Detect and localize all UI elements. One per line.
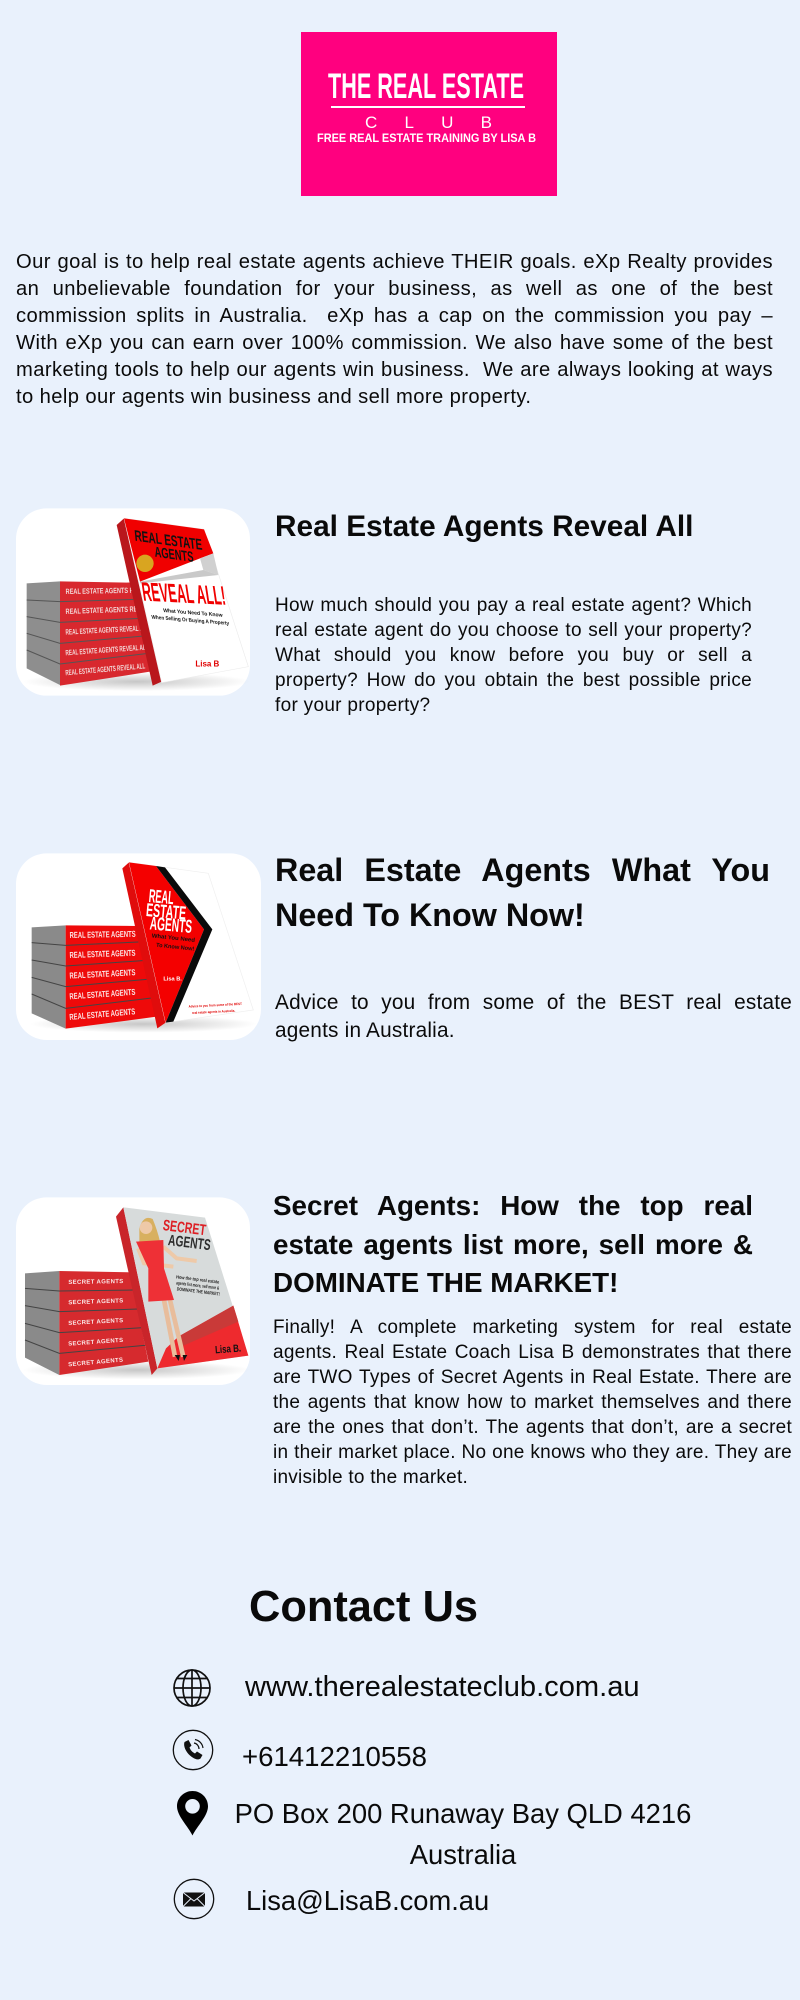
- standing book: agents list more, sell more &: [176, 1280, 220, 1291]
- panel: book 3 image, Secret Agents: [16, 1198, 250, 1385]
- stack of books: REAL ESTATE AGENTS REVEAL ALL: [65, 623, 149, 637]
- text block: Secret Agents description: [273, 1316, 792, 1488]
- intro paragraph: With eXp you can earn over 100% commission. We also have some of the best: [16, 332, 773, 354]
- standing book: ESTATE: [145, 899, 187, 923]
- stack of books: SECRET AGENTS: [68, 1338, 123, 1348]
- stack of books: REAL ESTATE AGENTS REVEAL ALL: [65, 661, 146, 677]
- standing book: Advice to you from some of the BEST: [189, 1002, 242, 1009]
- heading: Real Estate Agents What You Need To Know Now: Real Estate Agents What You: [275, 852, 770, 888]
- text block: Reveal All description: [275, 595, 752, 716]
- heading: Secret Agents: Secret Agents: How the top real: [273, 1190, 753, 1221]
- standing book: What You Need: [151, 933, 196, 944]
- text block: Secret Agents description: in their market place. No one knows who they are. They are: [273, 1442, 792, 1462]
- text block: Reveal All description: real estate agent do you choose to sell your property?: [275, 620, 752, 641]
- heading: Real Estate Agents What You Need To Know Now: [275, 852, 770, 933]
- address: PO Box 200 Runaway Bay QLD 4216: [235, 1798, 691, 1829]
- standing book: SECRET: [162, 1217, 207, 1239]
- heading: Contact Us: Contact Us: [249, 1583, 478, 1631]
- text block: Secret Agents description: agents. Real Estate Coach Lisa B demonstrates that there: [273, 1342, 792, 1362]
- logo: The Real Estate Club: FREE REAL ESTATE TRAINING BY LISA B: [317, 131, 536, 145]
- text block: Secret Agents description: the agents that know how to market themselves and there: [273, 1392, 792, 1412]
- standing book: What You Need To Know: [163, 608, 224, 619]
- phone number: +61412210558: [242, 1741, 427, 1772]
- standing book: To Know Now!: [156, 943, 195, 953]
- standing book: [116, 1207, 248, 1375]
- standing book: Lisa B: [195, 660, 220, 669]
- icon: email: [174, 1878, 214, 1920]
- text block: Secret Agents description: invisible to the market.: [273, 1466, 468, 1488]
- stack of books: SECRET AGENTS: [68, 1298, 123, 1306]
- standing book: AGENTS: [154, 545, 194, 566]
- text block: Secret Agents description: are TWO Types of Secret Agents in Real Estate. There are: [273, 1366, 792, 1388]
- intro paragraph: Our goal is to help real estate agents achieve THEIR goals. eXp Realty provides: [16, 251, 773, 273]
- standing book: AGENTS: [149, 912, 193, 937]
- intro paragraph: an unbelievable foundation for your business, as well as one of the best: [16, 278, 773, 300]
- standing book: How the top real estate: [176, 1274, 220, 1285]
- standing book: [122, 862, 253, 1028]
- stack of books: REAL ESTATE AGENTS REVEAL ALL: [65, 643, 149, 657]
- icon: phone: [172, 1730, 214, 1770]
- website: www.therealestateclub.com.au: [245, 1671, 640, 1703]
- stack of books: SECRET AGENTS: [68, 1279, 123, 1286]
- stack of books: [27, 581, 153, 686]
- stack of books: REAL ESTATE AGENTS: [70, 929, 136, 940]
- address: [235, 1798, 691, 1870]
- text block: Secret Agents description: are the ones that don’t. The agents that don’t, are a secret: [273, 1416, 792, 1438]
- email address: Lisa@LisaB.com.au: [246, 1885, 489, 1916]
- stack of books: SECRET AGENTS: [68, 1318, 123, 1327]
- panel: book 2 image, What You Need To Know Now: [16, 854, 261, 1040]
- standing book: [117, 518, 248, 686]
- address: Australia: [410, 1839, 516, 1870]
- standing book: Lisa B.: [215, 1343, 241, 1356]
- text block: Reveal All description: for your property?: [275, 695, 430, 716]
- heading: Secret Agents: estate agents list more, sell more &: [273, 1228, 753, 1260]
- heading: Secret Agents: [273, 1190, 753, 1298]
- intro paragraph: [16, 251, 773, 408]
- standing book: REAL ESTATE: [134, 528, 203, 554]
- stack of books: REAL ESTATE AGENTS: [69, 967, 136, 981]
- stack of books: REAL ESTATE AGENTS: [69, 987, 136, 1001]
- text block: Reveal All description: How much should you pay a real estate agent? Which: [275, 595, 752, 616]
- stack of books: REAL ESTATE AGENTS: [69, 1006, 136, 1022]
- standing book: REAL: [148, 885, 175, 908]
- heading: Secret Agents: DOMINATE THE MARKET!: [273, 1267, 618, 1298]
- stack of books: REAL ESTATE AGENTS REVEAL: [66, 585, 153, 596]
- standing book: When Selling Or Buying A Property: [151, 615, 229, 627]
- standing book: DOMINATE THE MARKET!: [177, 1286, 220, 1297]
- panel: book 1 image, Reveal All: [16, 508, 250, 696]
- stack of books: [25, 1271, 148, 1375]
- stack of books: [32, 925, 157, 1029]
- logo: The Real Estate Club: CLUB: [365, 113, 492, 132]
- intro paragraph: to help our agents win business and sell more property.: [16, 386, 531, 408]
- text block: What You Need description: Advice to you from some of the BEST real estate: [275, 991, 792, 1014]
- standing book: AGENTS: [167, 1232, 212, 1254]
- stack of books: REAL ESTATE AGENTS REVEAL: [65, 604, 153, 616]
- logo: The Real Estate Club: [301, 32, 557, 196]
- heading: Real Estate Agents What You Need To Know Now: Need To Know Now!: [275, 897, 585, 933]
- text block: Reveal All description: What should you know before you buy or sell a: [275, 645, 752, 666]
- standing book: real estate agents in Australia.: [192, 1009, 235, 1015]
- icon: globe: [173, 1669, 211, 1707]
- intro paragraph: commission splits in Australia. eXp has a cap on the commission you pay –: [16, 305, 773, 327]
- text block: What You Need description: [275, 991, 792, 1042]
- text block: What You Need description: agents in Australia.: [275, 1018, 455, 1042]
- stack of books: REAL ESTATE AGENTS: [69, 948, 136, 960]
- text block: Secret Agents description: Finally! A complete marketing system for real estate: [273, 1316, 792, 1338]
- icon: location pin: [177, 1791, 208, 1836]
- standing book: Lisa B.: [163, 977, 182, 983]
- stack of books: SECRET AGENTS: [68, 1358, 123, 1368]
- text block: Reveal All description: property? How do you obtain the best possible price: [275, 670, 752, 691]
- woman on cover: [136, 1218, 197, 1361]
- intro paragraph: marketing tools to help our agents win business. We are always looking at ways: [16, 359, 773, 381]
- heading: Real Estate Agents Reveal All: Real Estate Agents Reveal All: [275, 510, 693, 543]
